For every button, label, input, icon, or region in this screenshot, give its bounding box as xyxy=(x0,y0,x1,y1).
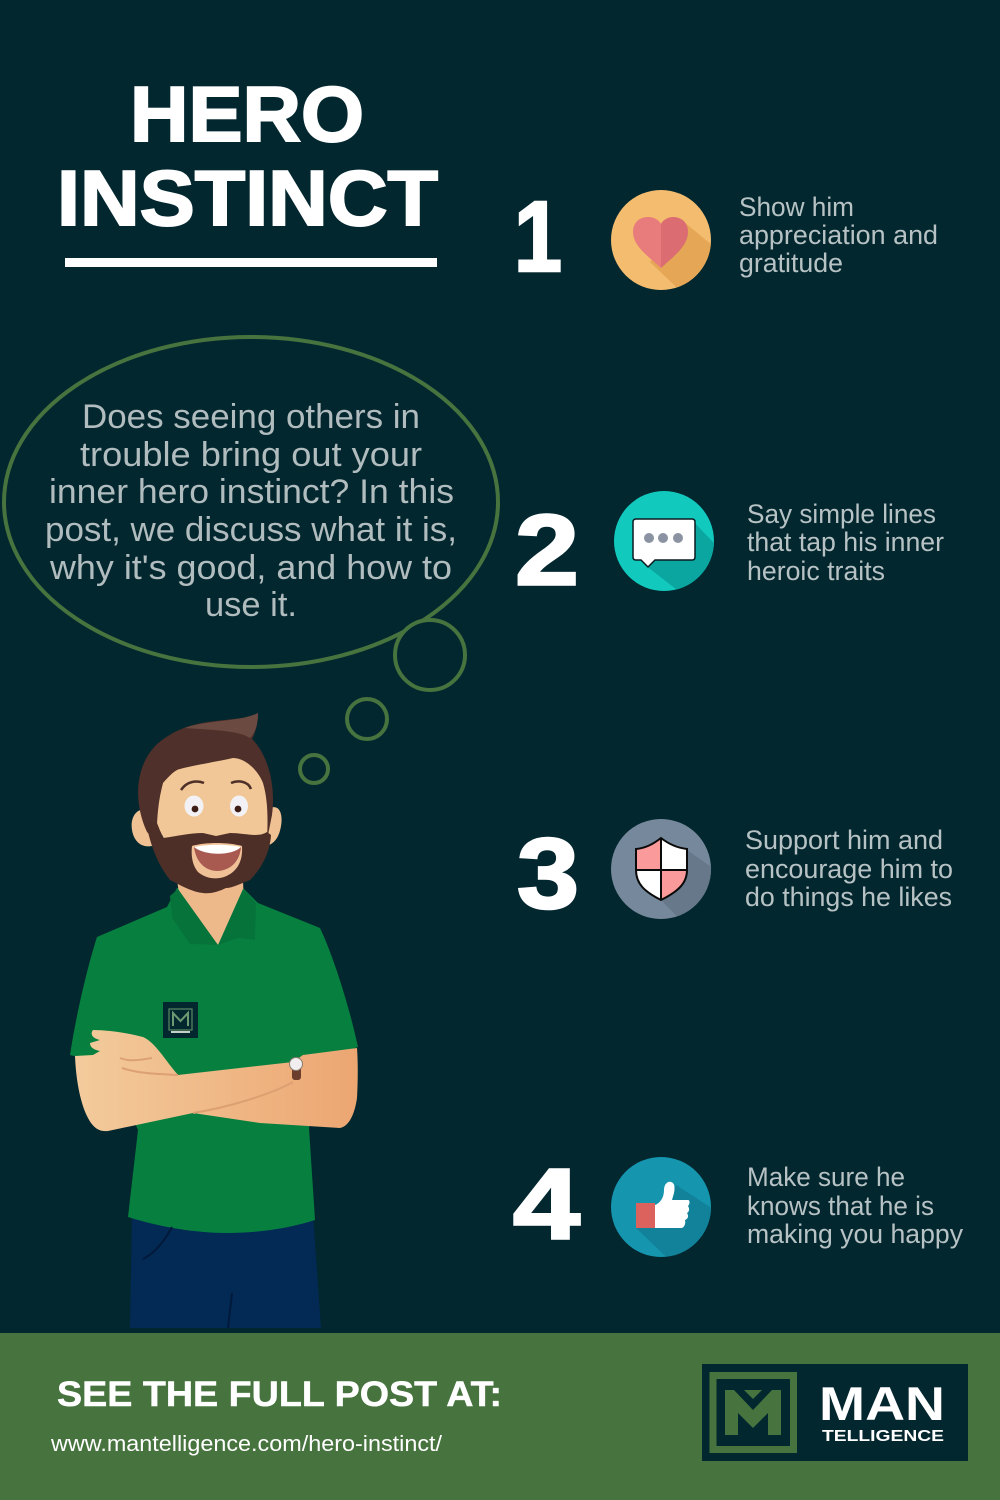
step 1: 1 xyxy=(514,181,562,293)
shirt xyxy=(70,888,358,1233)
thought bubble: inner hero instinct? In this xyxy=(49,473,454,511)
thought bubble: post, we discuss what it is, xyxy=(45,511,457,549)
step 2: heroic traits xyxy=(747,556,885,586)
step 2: Say simple lines xyxy=(747,499,936,529)
step 4: Make sure he xyxy=(747,1162,905,1192)
ears xyxy=(132,807,282,846)
step 3: 3 xyxy=(517,818,579,930)
beard xyxy=(146,822,271,893)
step 4 xyxy=(513,1157,963,1257)
watch xyxy=(290,1058,302,1080)
pants xyxy=(130,1215,321,1328)
pants details xyxy=(143,1227,232,1328)
character illustration xyxy=(70,713,358,1328)
arms xyxy=(75,1030,358,1131)
hair xyxy=(138,713,273,835)
step 3 xyxy=(518,819,952,919)
title xyxy=(57,70,438,267)
footer band xyxy=(0,1333,1000,1500)
face xyxy=(157,758,268,870)
footer call to action: SEE THE FULL POST AT: xyxy=(57,1375,502,1414)
step 1: Show him xyxy=(739,192,854,222)
collar xyxy=(170,889,256,945)
step 3: do things he likes xyxy=(745,882,952,912)
thought bubble xyxy=(4,337,498,783)
thought bubble: Does seeing others in xyxy=(82,398,420,436)
neck xyxy=(177,880,244,945)
icon: heart xyxy=(611,190,711,290)
logo xyxy=(702,1364,968,1461)
step 4: 4 xyxy=(513,1148,580,1260)
footer url: www.mantelligence.com/hero-instinct/ xyxy=(50,1431,443,1456)
step 4: knows that he is xyxy=(747,1191,934,1221)
icon: speech bubble xyxy=(614,491,714,591)
shirt logo xyxy=(163,1002,198,1038)
step 2 xyxy=(518,491,944,591)
icon: shield xyxy=(611,819,711,919)
title: HERO xyxy=(130,70,364,158)
step 1: appreciation and xyxy=(739,220,938,250)
step 3: Support him and xyxy=(745,825,943,855)
eyes xyxy=(181,781,251,816)
step 1 xyxy=(518,190,936,290)
step 3: encourage him to xyxy=(745,854,953,884)
step 4: making you happy xyxy=(747,1219,963,1249)
mouth xyxy=(192,843,242,878)
thought bubble: trouble bring out your xyxy=(80,436,422,474)
step 2: that tap his inner xyxy=(747,527,944,557)
logo: MAN xyxy=(819,1377,945,1430)
logo: TELLIGENCE xyxy=(822,1428,944,1445)
step 2: 2 xyxy=(515,494,579,606)
step 1: gratitude xyxy=(739,248,843,278)
thought bubble: use it. xyxy=(205,586,297,624)
icon: thumbs up xyxy=(611,1157,711,1257)
title: INSTINCT xyxy=(57,154,438,242)
arm crease xyxy=(120,1058,293,1113)
thought bubble: why it's good, and how to xyxy=(49,549,452,587)
